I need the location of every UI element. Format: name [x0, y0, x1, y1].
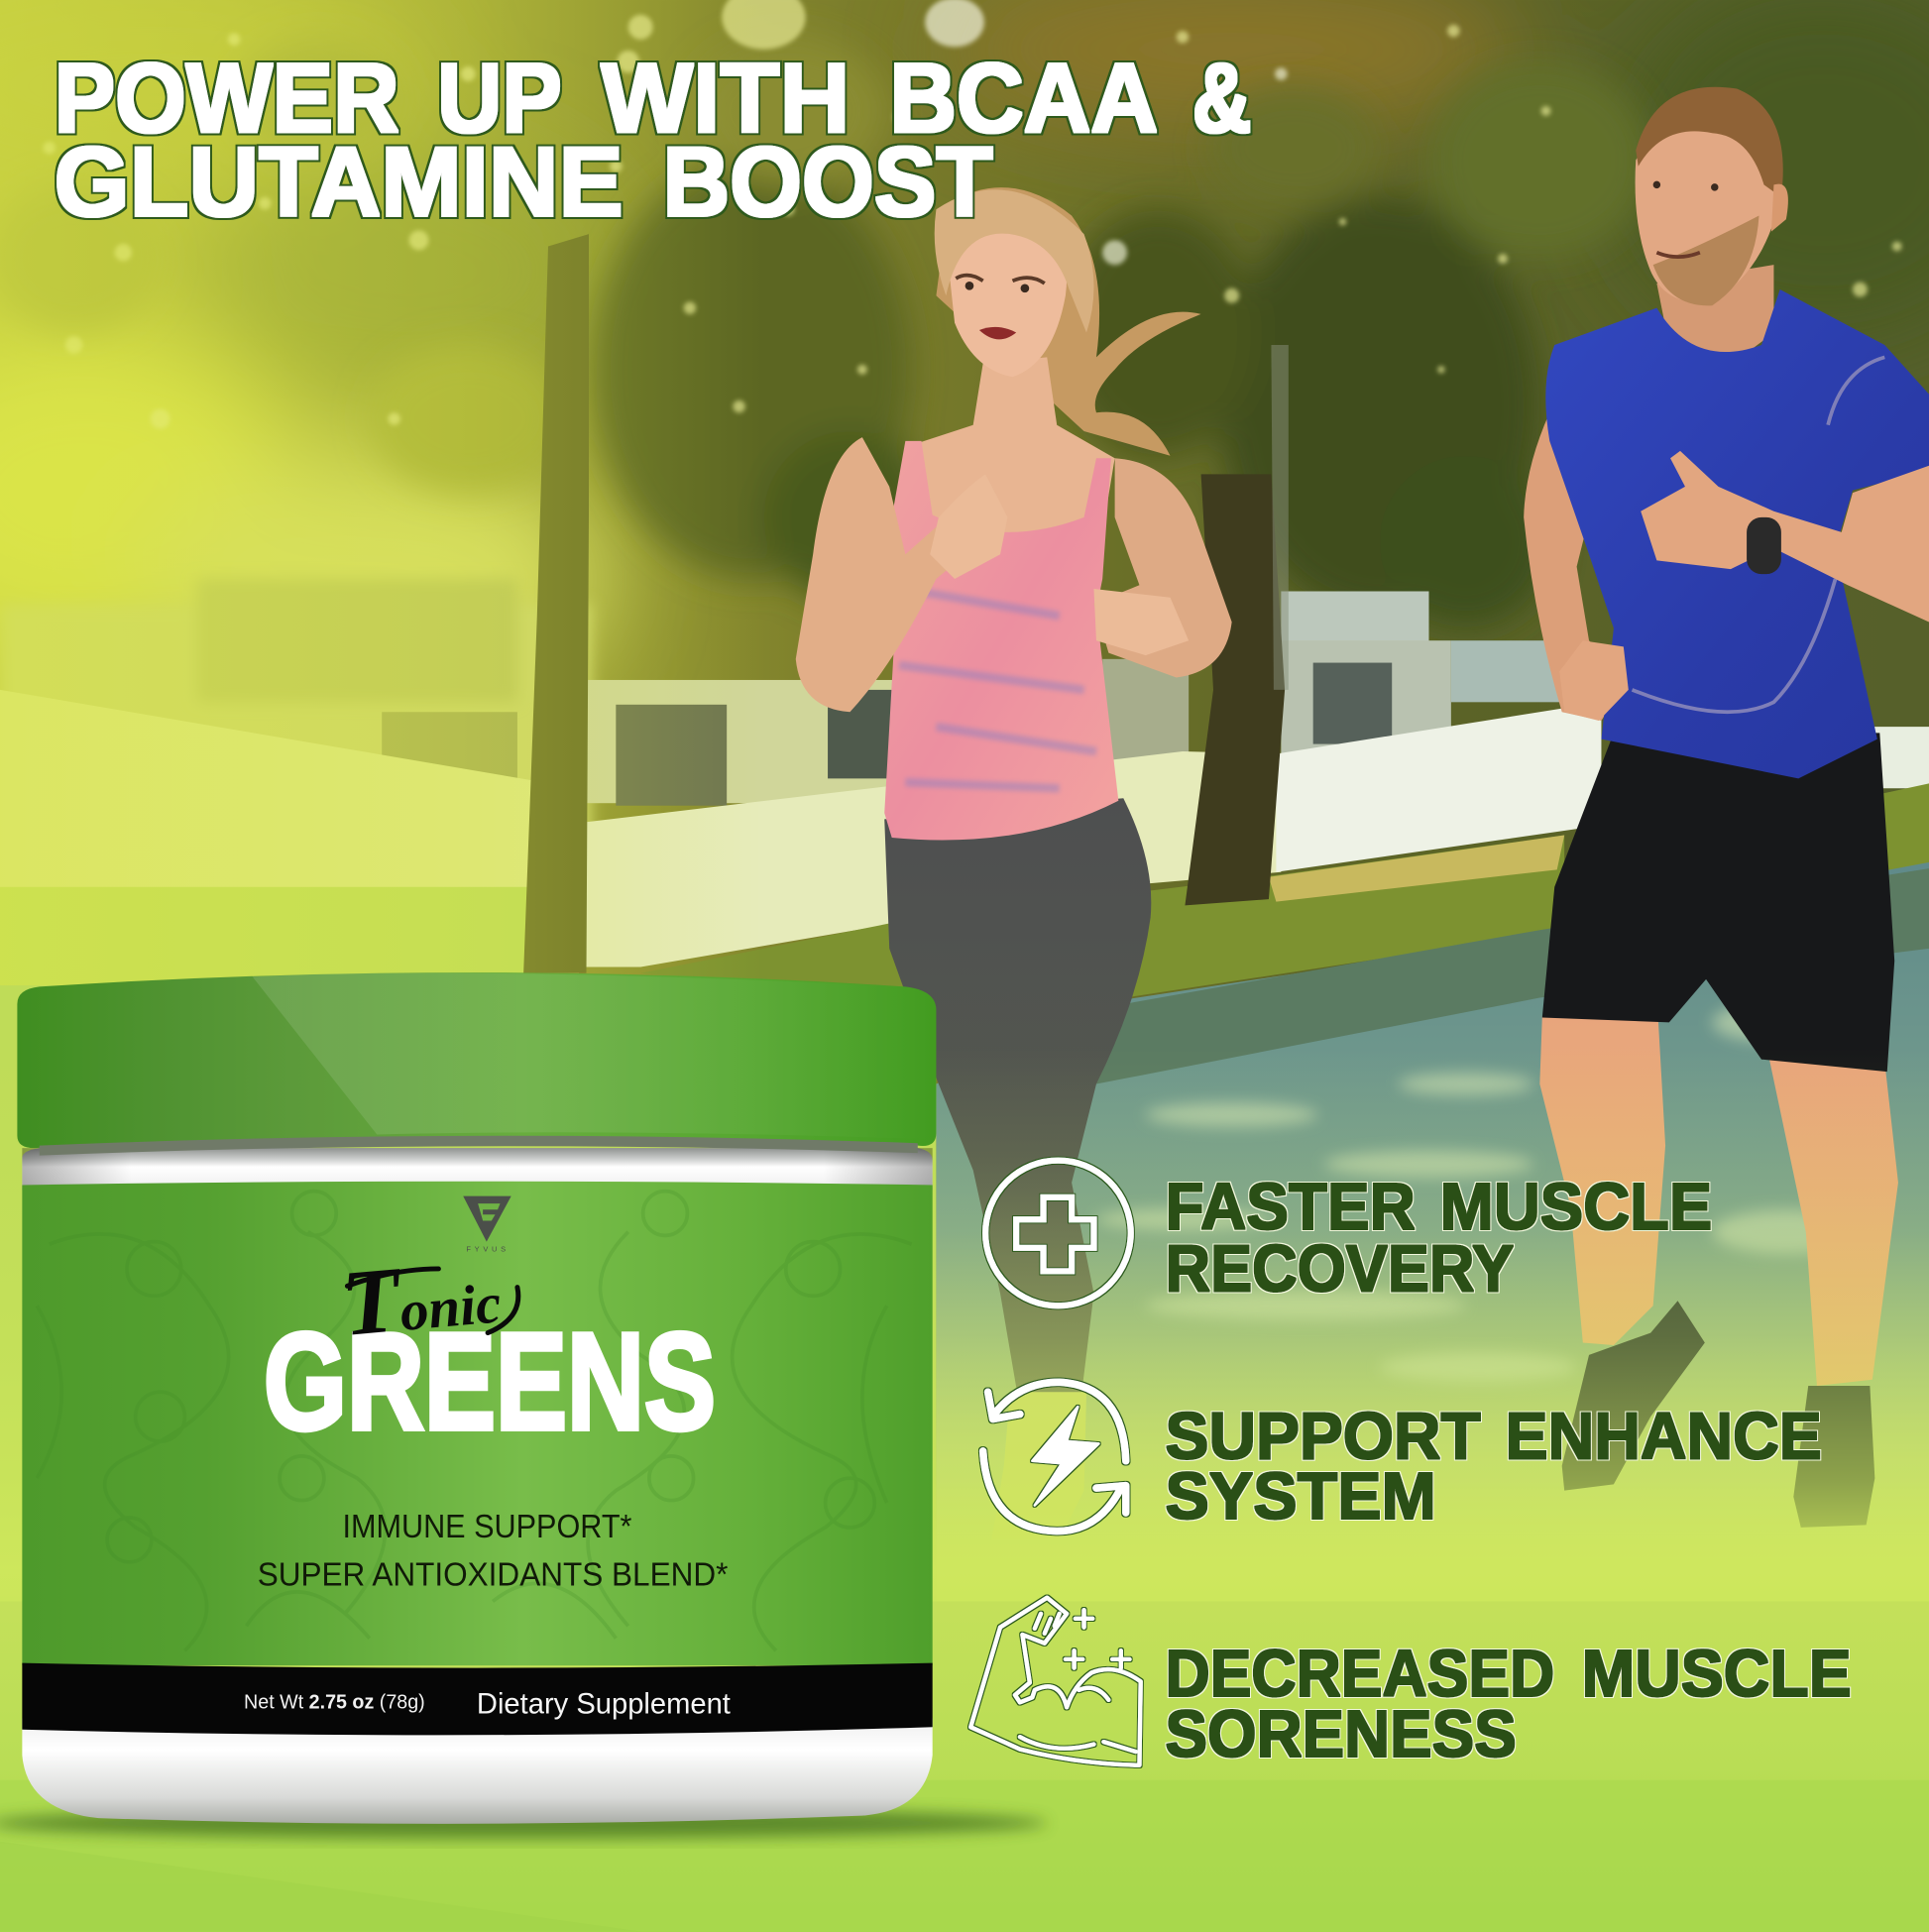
feature text: faster muscle recovery: FASTER [1166, 1170, 1416, 1244]
feature text: faster muscle recovery [1166, 1170, 1712, 1306]
product name [264, 1239, 716, 1458]
product jar [0, 972, 1047, 1839]
black band [22, 1663, 933, 1735]
bottom fade overlay [0, 1047, 1929, 1932]
product name: GREENS [264, 1305, 716, 1458]
feature text: decreased muscle soreness: SORENESS [1166, 1697, 1517, 1771]
grass [640, 783, 1929, 1004]
brand logo: FYVUS [466, 1245, 510, 1254]
product name: Tonic [338, 1239, 504, 1356]
title: UP [437, 44, 562, 154]
icon: flexed muscle [970, 1598, 1141, 1765]
title: POWER [55, 44, 399, 154]
title: WITH [601, 44, 850, 154]
man left arm [1524, 412, 1629, 721]
man hand left [1559, 640, 1629, 721]
label ornament [37, 1192, 912, 1650]
feature text: faster muscle recovery: RECOVERY [1166, 1231, 1514, 1306]
feature text: support enhance system: SUPPORT [1166, 1399, 1481, 1473]
feature text: decreased muscle soreness: DECREASED [1166, 1637, 1554, 1711]
woman shoe [991, 1392, 1086, 1539]
man head [1636, 124, 1774, 302]
man shorts [1542, 733, 1894, 1072]
man runner [1524, 87, 1929, 1528]
woman left arm [796, 437, 973, 712]
net weight: Net Wt 2.75 oz (78g) [244, 1692, 425, 1714]
paved path [936, 862, 1929, 1601]
product claims: SUPER ANTIOXIDANTS BLEND* [258, 1556, 728, 1593]
woman chest and neck [899, 357, 1115, 554]
feature text: decreased muscle soreness [1166, 1637, 1852, 1771]
distant wall and fence [0, 579, 1562, 850]
feature text: support enhance system: SYSTEM [1166, 1459, 1436, 1534]
lid lip shadow [40, 1136, 918, 1156]
hair back [936, 187, 1201, 456]
icon: medical cross [985, 1161, 1131, 1306]
brand logo [463, 1196, 511, 1254]
woman runner [796, 187, 1232, 1539]
jar base [22, 1719, 933, 1824]
left lawn [0, 862, 936, 1931]
lid [17, 972, 936, 1148]
feature text: support enhance system: ENHANCE [1506, 1399, 1822, 1473]
title: GLUTAMINE [55, 127, 624, 237]
feature text: faster muscle recovery: MUSCLE [1440, 1170, 1712, 1244]
man blue shirt [1545, 289, 1929, 778]
dietary supplement: Dietary Supplement [477, 1688, 732, 1721]
woman pink tank top [882, 441, 1118, 841]
man neck [1656, 265, 1773, 370]
product claims [258, 1509, 728, 1593]
icon: energy cycle [983, 1382, 1126, 1532]
jar label [22, 1182, 933, 1665]
man shoes [1562, 1301, 1705, 1491]
jar neck [22, 1148, 933, 1190]
man watch [1747, 517, 1781, 574]
feature text: decreased muscle soreness: MUSCLE [1582, 1637, 1852, 1711]
woman fists [930, 474, 1007, 579]
title: & [1192, 44, 1252, 154]
woman face [949, 215, 1067, 377]
tree trunks [523, 234, 589, 973]
man legs [1539, 1016, 1665, 1345]
man right arm and hand [1641, 451, 1929, 623]
title: BOOST [663, 127, 993, 237]
title [55, 44, 1252, 237]
jar shadow [0, 1807, 1047, 1839]
woman leggings [884, 798, 1151, 1395]
far road [579, 751, 1281, 966]
tree foliage [0, 37, 1650, 628]
title: BCAA [889, 44, 1158, 154]
feature text: support enhance system [1166, 1399, 1822, 1534]
product claims: IMMUNE SUPPORT* [342, 1509, 631, 1545]
left colour wash [0, 0, 763, 985]
woman right arm [1093, 458, 1232, 677]
